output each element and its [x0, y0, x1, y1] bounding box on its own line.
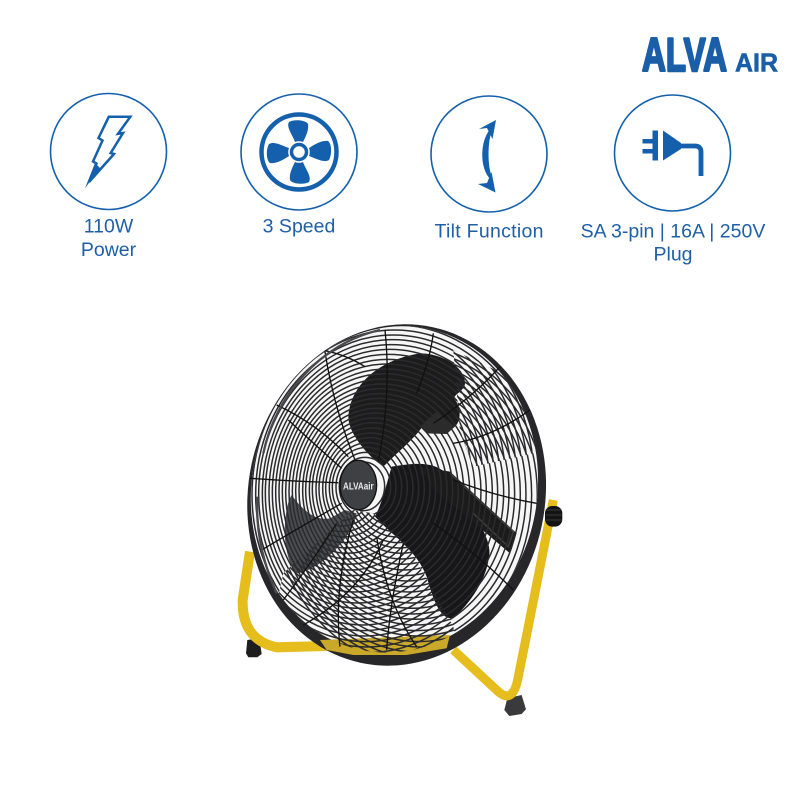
label: Tilt Function: Tilt Function	[434, 220, 544, 242]
feature: tilt function	[431, 96, 547, 242]
yellow base seen through grille	[320, 635, 450, 655]
feature: plug	[581, 95, 765, 266]
label: 110W Power: 110W	[84, 216, 134, 238]
rim shell	[216, 296, 577, 694]
icon: plug	[614, 95, 730, 211]
wire grille rings	[251, 326, 538, 652]
hub with logo: ALVAair	[343, 481, 374, 492]
rear stand legs	[243, 500, 553, 696]
diamond mesh, lower section	[278, 510, 455, 652]
label: 3 Speed: 3 Speed	[263, 216, 335, 238]
grille interior	[221, 299, 568, 679]
rubber feet	[246, 638, 526, 716]
tilt knob	[545, 506, 562, 527]
motor and cable	[420, 412, 455, 434]
diamond mesh, upper right section	[454, 351, 536, 466]
feature: 110W power	[50, 94, 166, 261]
logo: ALVA AIR: AIR	[735, 48, 778, 78]
icon: lightning bolt	[50, 94, 166, 210]
logo: ALVA AIR: ALVA	[642, 28, 727, 81]
label: SA 3-pin | 16A | 250V Plug: SA 3-pin | 16A | 250V	[581, 220, 765, 242]
inner rim hoop	[257, 330, 380, 593]
hub with logo	[340, 460, 377, 510]
label: 110W Power: Power	[81, 239, 137, 261]
grille spokes	[250, 330, 537, 650]
feature: 3 speed	[241, 94, 357, 238]
fan blades	[285, 353, 517, 618]
icon: fan	[241, 94, 357, 210]
icon: tilt arrows	[431, 96, 547, 212]
label: SA 3-pin | 16A | 250V Plug: Plug	[653, 244, 693, 266]
product photo: floor fan	[238, 324, 562, 716]
